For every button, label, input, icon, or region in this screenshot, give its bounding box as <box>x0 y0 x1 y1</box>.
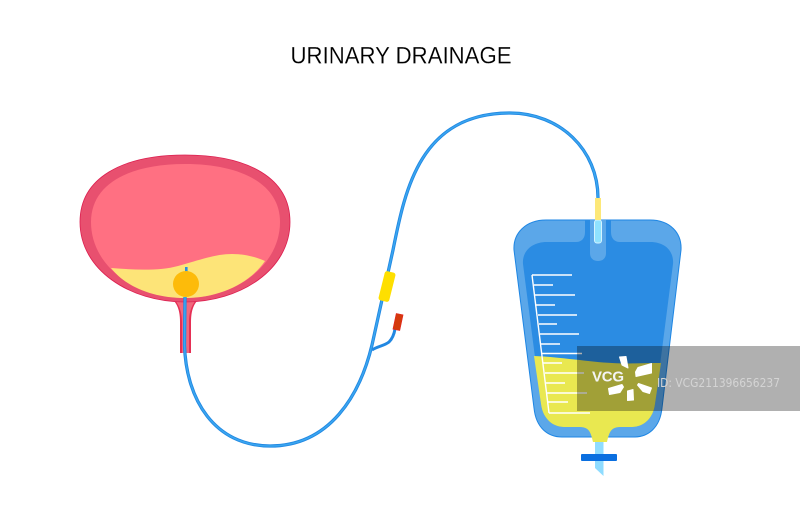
urine in bladder <box>111 254 265 298</box>
yellow inlet connector <box>595 198 601 220</box>
bladder <box>80 155 290 353</box>
yellow connector <box>378 271 396 302</box>
bag outer <box>514 220 681 437</box>
scale ticks <box>532 275 590 413</box>
clamp <box>581 454 617 461</box>
inner drip tube <box>594 220 602 243</box>
catheter tip <box>185 267 188 273</box>
inlet sleeve <box>590 220 606 261</box>
drainage bag <box>514 198 681 476</box>
watermark pinwheel <box>608 356 652 400</box>
drainage tube <box>184 113 598 446</box>
bag inner <box>523 220 673 427</box>
watermark id: ID: VCG211396656237 <box>657 376 780 390</box>
bladder outer wall <box>80 155 290 302</box>
urethra <box>168 296 203 353</box>
catheter balloon <box>173 271 199 297</box>
urine in bag <box>534 356 661 442</box>
bladder inner cavity <box>91 164 280 298</box>
red port <box>393 313 403 331</box>
watermark <box>577 346 800 411</box>
outlet spout <box>595 440 604 476</box>
tube branch <box>372 329 395 350</box>
title: URINARY DRAINAGE <box>290 42 512 70</box>
watermark logo text: VCG <box>592 368 624 386</box>
watermark band <box>577 346 800 411</box>
